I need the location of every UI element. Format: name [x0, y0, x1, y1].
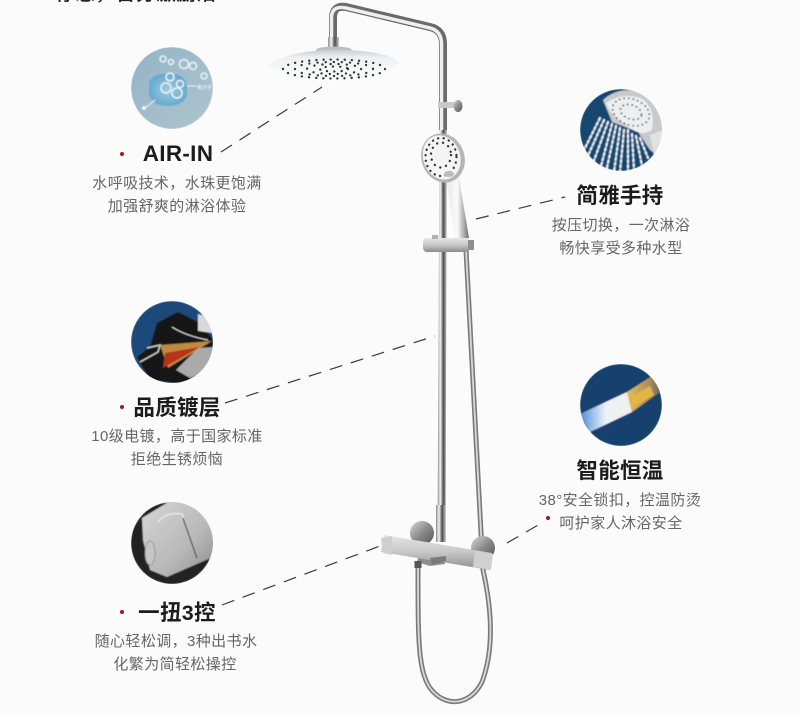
- overhead shower head: [269, 37, 399, 81]
- leader line: [222, 546, 380, 605]
- icon: water molecule: 氧分子: [197, 84, 212, 91]
- heading: 品质镀层: [133, 396, 221, 420]
- bullet: [120, 610, 124, 614]
- description: 呵护家人沐浴安全: [559, 514, 683, 532]
- heading: 简雅手持: [576, 184, 664, 208]
- icon: valve handle: [131, 501, 215, 584]
- description: 随心轻松调，3种出书水: [95, 633, 257, 650]
- bullet: [546, 516, 550, 520]
- heading: AIR-IN: [143, 141, 213, 166]
- bullet: [120, 405, 124, 409]
- wall bracket: [438, 100, 462, 112]
- leader line: [221, 87, 322, 152]
- description: 38°安全锁扣，控温防烫: [539, 491, 701, 509]
- panel: AIR-IN: [92, 47, 322, 215]
- hose: [418, 250, 490, 702]
- icon: plating layers: [131, 301, 214, 384]
- description: 拒绝生锈烦恼: [131, 451, 223, 468]
- description: 畅快享受多种水型: [559, 240, 683, 257]
- panel: 一扭3控: [95, 501, 380, 673]
- description: 水呼吸技术，水珠更饱满: [92, 175, 262, 192]
- thermostatic valve: [381, 521, 495, 570]
- heading: 智能恒温: [576, 459, 664, 483]
- leader line: [476, 197, 565, 219]
- description: 按压切换，一次淋浴: [552, 217, 690, 234]
- shower set product: [269, 7, 495, 702]
- panel: 品质镀层: [91, 301, 435, 468]
- description: 10级电镀，高于国家标准: [91, 428, 263, 445]
- icon: thermostat cartridge: [580, 364, 666, 446]
- panel: 简雅手持: [476, 89, 690, 257]
- riser pipe: [332, 7, 447, 540]
- panel: 智能恒温: [507, 364, 701, 543]
- bullet: [120, 152, 124, 156]
- heading: 一扭3控: [138, 601, 216, 625]
- slide holder: [423, 235, 474, 252]
- hand shower: [414, 127, 472, 238]
- leader line: [225, 336, 435, 403]
- icon: hand shower spray: [580, 89, 668, 172]
- leader line: [507, 521, 545, 543]
- description: 加强舒爽的淋浴体验: [108, 198, 246, 215]
- icon: water molecule: [131, 47, 213, 129]
- description: 化繁为简轻松操控: [113, 656, 237, 673]
